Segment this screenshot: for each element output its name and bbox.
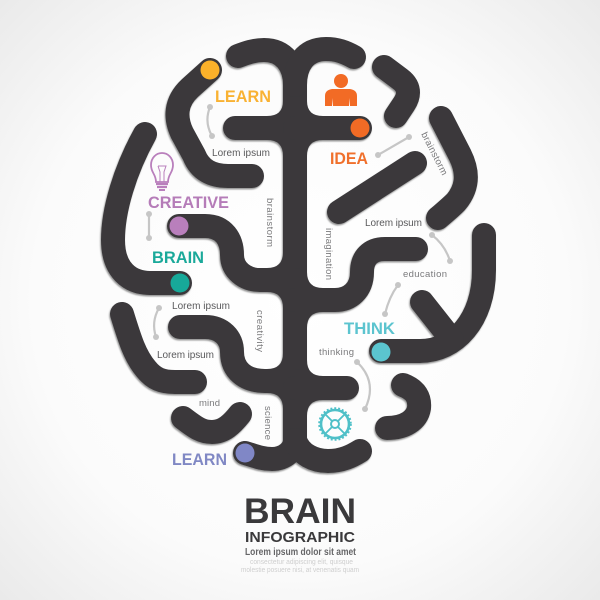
tagline: Lorem ipsum dolor sit amet	[245, 547, 357, 558]
dot: yellow	[200, 60, 220, 80]
dot: blue	[236, 444, 254, 462]
yellow learn branch	[177, 70, 252, 176]
label: BRAIN: BRAIN	[152, 248, 204, 267]
mind smile lobe	[183, 414, 240, 432]
dot: teal	[170, 274, 190, 292]
learn upper side branch	[235, 116, 295, 140]
text: lorem ipsum upper left: Lorem ipsum	[212, 148, 270, 159]
text: imagination: imagination	[323, 228, 334, 280]
trunk	[283, 85, 307, 440]
bottom left branch	[245, 440, 295, 459]
top left lobe branch	[238, 50, 295, 85]
text: lorem ipsum upper right: Lorem ipsum	[365, 218, 422, 229]
grey connectors	[146, 104, 453, 412]
diagonal lobe	[339, 163, 415, 212]
lower left branch	[180, 327, 295, 381]
far lower left lobe	[122, 314, 195, 382]
title: BRAIN: BRAIN	[244, 492, 356, 531]
label: CREATIVE: CREATIVE	[148, 193, 229, 212]
text: lorem ipsum lower left: Lorem ipsum	[157, 350, 214, 361]
top right boomerang lobe	[384, 67, 408, 116]
dot: purple	[170, 216, 188, 236]
text: brainstorm diagonal: brainstorm	[418, 130, 450, 177]
c-shaped lobe	[387, 385, 419, 428]
bottom right branch	[295, 440, 360, 461]
far right branch	[381, 235, 484, 351]
label: LEARN yellow: LEARN	[215, 87, 271, 106]
small line 2: molestie posuere nisi, at venenatis quam	[241, 567, 359, 574]
text: thinking: thinking	[319, 347, 354, 358]
subtitle: INFOGRAPHIC: INFOGRAPHIC	[245, 529, 355, 546]
outer left brain branch	[113, 134, 180, 283]
small line 1: consectetur adipiscing elit, quisque	[250, 559, 353, 566]
text: mind: mind	[199, 398, 220, 409]
imagination branch	[295, 249, 416, 300]
dot: orange	[350, 118, 370, 138]
text: education: education	[403, 269, 447, 280]
icon: light bulb	[151, 153, 173, 190]
label: THINK: THINK	[344, 319, 396, 338]
junction fillets	[267, 101, 323, 416]
text: lorem ipsum mid left: Lorem ipsum	[172, 301, 230, 312]
title block	[241, 492, 359, 574]
idea branch	[295, 116, 360, 140]
think fork	[422, 302, 452, 340]
label: LEARN blue: LEARN	[172, 450, 227, 469]
top right lobe branch	[295, 49, 354, 85]
right large lobe	[438, 118, 466, 218]
text: creativity: creativity	[254, 310, 265, 352]
text: brainstorm left: brainstorm	[264, 198, 275, 247]
label: IDEA: IDEA	[330, 149, 368, 168]
icon: person	[325, 74, 357, 106]
text: science: science	[262, 406, 273, 440]
brain diagram	[113, 49, 484, 461]
creative branch	[179, 226, 295, 280]
gear upper branch	[295, 376, 347, 400]
dot: cyan	[372, 342, 390, 362]
icon: gear	[320, 408, 350, 440]
